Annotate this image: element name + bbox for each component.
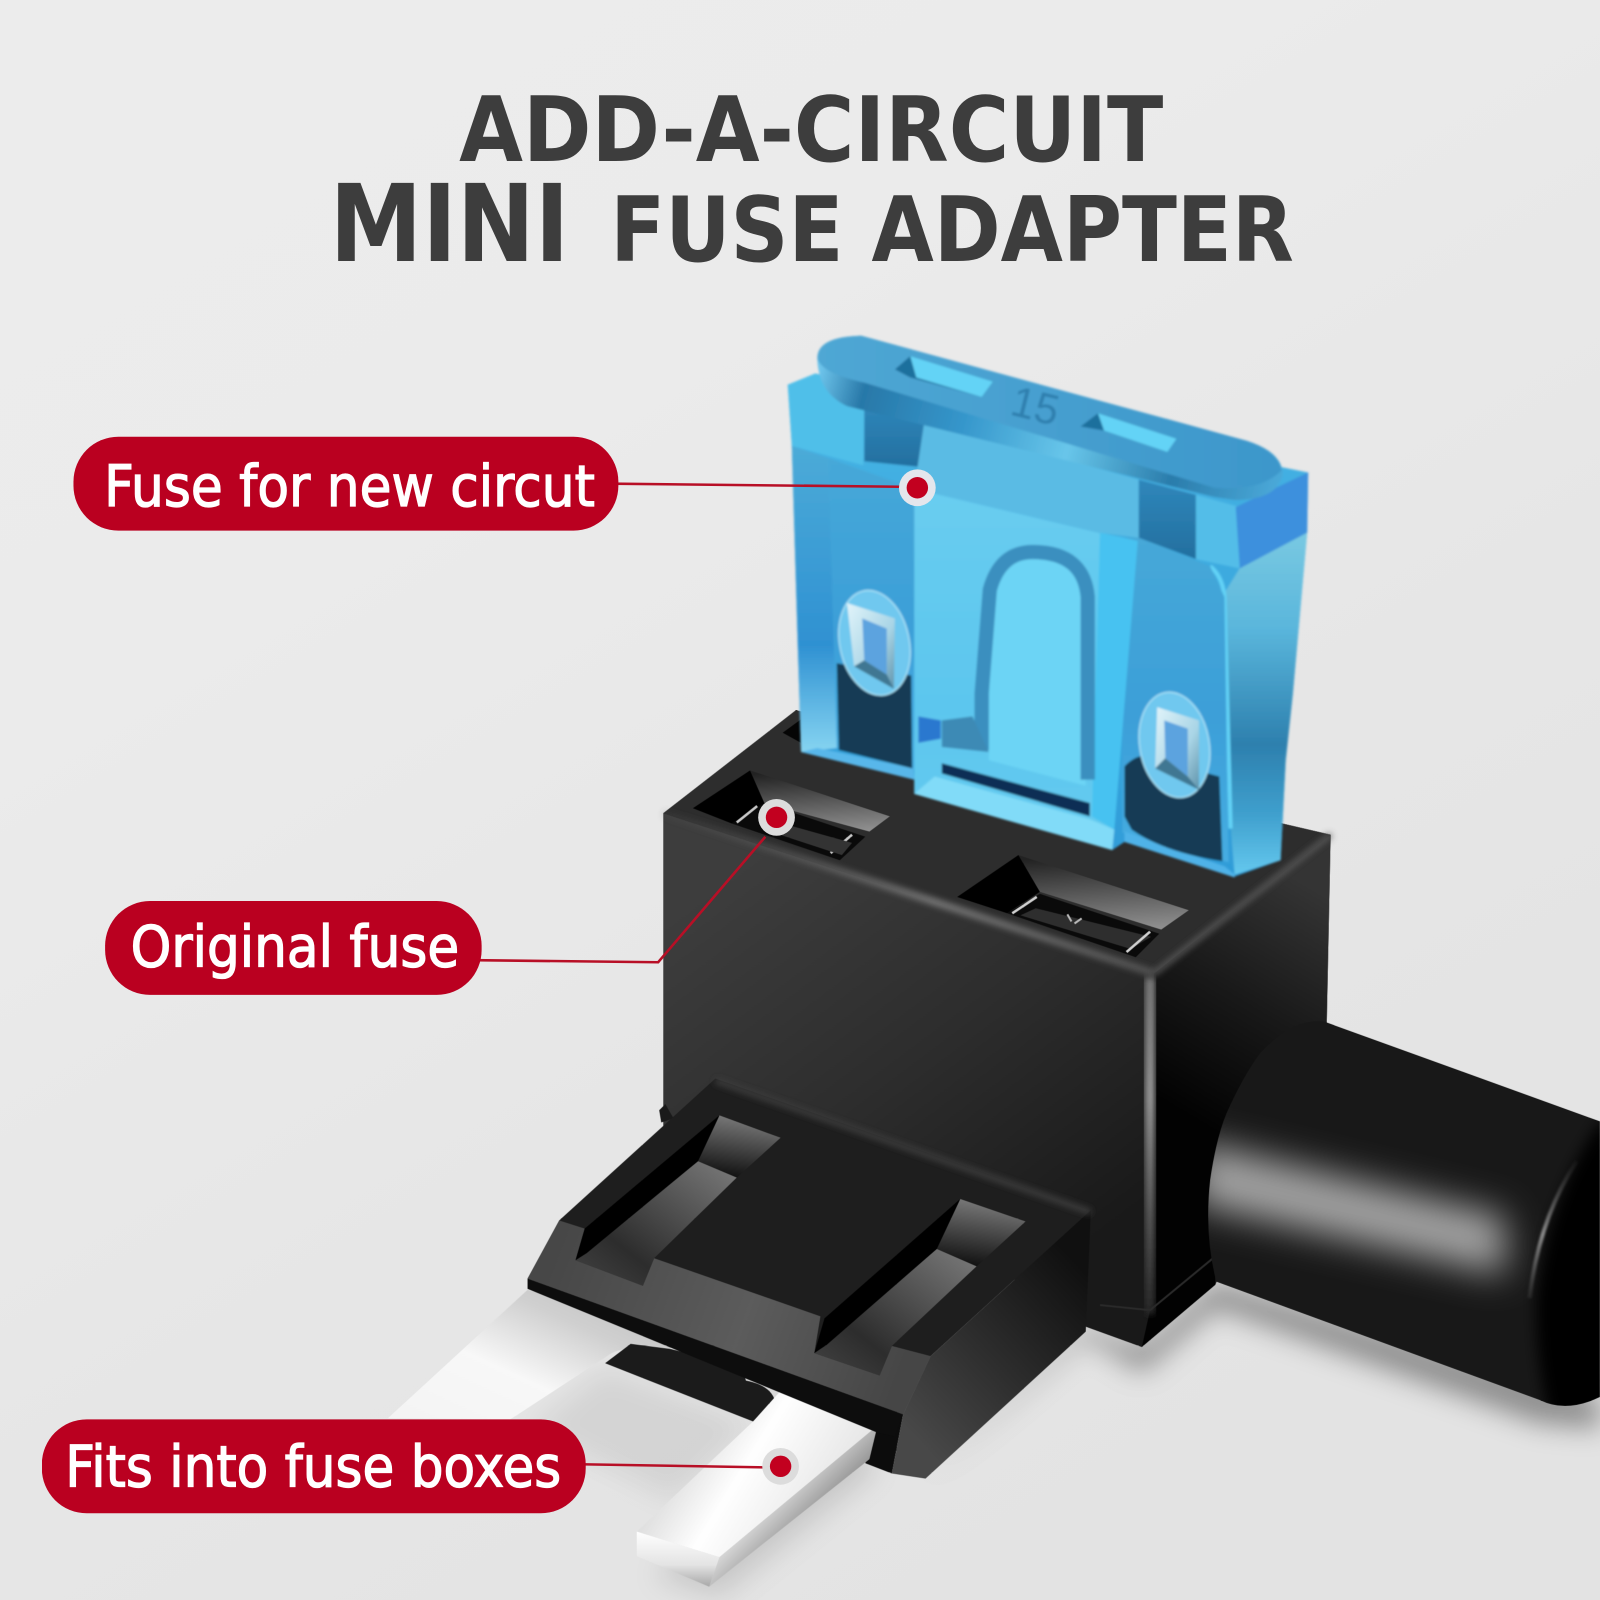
boot base — [1194, 1010, 1600, 1418]
housing right face — [1142, 835, 1331, 1347]
centre shoulder — [914, 420, 1139, 538]
cable boot — [1208, 1022, 1600, 1406]
left shoulder — [788, 373, 867, 465]
cap rating number: 15 — [1006, 377, 1064, 436]
ground shadows — [531, 1282, 1600, 1597]
trace foot — [942, 716, 989, 752]
housing bottom lip — [1100, 1257, 1214, 1310]
right shoulder side — [1236, 472, 1308, 568]
blade tip — [637, 1532, 719, 1587]
plug lower edge — [528, 1279, 903, 1437]
strip below slit — [914, 777, 1114, 850]
rear slot — [783, 719, 801, 743]
callout: fits into fuse boxes — [42, 1419, 799, 1513]
leader line — [580, 1464, 765, 1467]
label pill — [105, 901, 482, 995]
right shoulder shade — [1139, 480, 1196, 559]
plug — [388, 1079, 1091, 1587]
label text: Original fuse — [131, 914, 459, 980]
title word: mini: MINI — [330, 163, 569, 287]
housing corner highlight — [1145, 978, 1155, 1314]
bright strip — [1092, 533, 1138, 830]
left rivet — [830, 584, 919, 702]
cap right slot — [1081, 413, 1177, 452]
fuse right side — [1224, 533, 1307, 874]
right blade — [637, 1371, 878, 1587]
plug wall beside blade — [865, 1414, 903, 1473]
label text: Fits into fuse boxes — [65, 1435, 561, 1501]
blade side — [709, 1426, 878, 1587]
fuse body — [788, 373, 1308, 877]
fuse window slit — [942, 763, 1090, 816]
right rivet — [1131, 687, 1218, 803]
product: fuse adapter illustration — [388, 336, 1600, 1597]
callout: fuse for new circuit — [73, 437, 936, 531]
plug back ridge — [715, 1081, 1091, 1212]
label pill — [42, 1419, 586, 1513]
inner bright edge — [1210, 566, 1231, 829]
leader line — [476, 837, 765, 962]
title line: add-a-circuit: ADD-A-CIRCUIT — [459, 79, 1163, 183]
bottom lips — [801, 748, 1235, 878]
title — [330, 79, 1294, 287]
left plug slot — [576, 1115, 781, 1286]
label pill — [73, 437, 618, 531]
trace inner fill — [989, 558, 1086, 786]
callout: original fuse — [105, 799, 795, 995]
blade hook — [743, 1371, 782, 1403]
U-shaped fuse trace — [918, 552, 1088, 786]
boot end rim — [1530, 1161, 1577, 1298]
blade top — [637, 1391, 878, 1557]
left fuse slot — [693, 770, 890, 860]
trace line — [982, 552, 1088, 780]
housing silhouette — [663, 710, 1331, 1347]
marker dot — [758, 799, 795, 836]
marker dot — [762, 1448, 799, 1485]
right window — [1122, 538, 1229, 862]
right plug slot — [814, 1199, 1026, 1376]
label text: Fuse for new circut — [104, 454, 595, 520]
right black pin — [1124, 756, 1222, 861]
plug front bevel — [528, 1220, 931, 1414]
plug top — [528, 1079, 1091, 1414]
housing left face — [663, 813, 1154, 1347]
leader line — [612, 484, 900, 487]
small contact — [918, 716, 941, 743]
marker dot — [899, 469, 936, 506]
right shoulder — [1196, 495, 1240, 568]
left window — [829, 458, 914, 770]
boot highlight — [1194, 1141, 1505, 1276]
boot end cap — [1537, 1122, 1600, 1423]
gap between blades — [605, 1344, 788, 1421]
plug notch — [659, 1104, 673, 1122]
fuse cap — [817, 336, 1283, 500]
plug side — [892, 1210, 1091, 1479]
left strip — [792, 446, 837, 752]
title words: fuse adapter: FUSE ADAPTER — [610, 179, 1294, 283]
blue mini fuse — [788, 336, 1308, 878]
housing ridge highlights — [663, 813, 1331, 973]
right fuse slot — [957, 855, 1189, 957]
cap left slot — [895, 356, 993, 397]
left black pin — [837, 663, 912, 768]
centre element — [914, 489, 1123, 850]
housing top face — [663, 710, 1331, 973]
left shoulder shade — [864, 403, 924, 467]
black housing — [663, 710, 1331, 1347]
left blade — [388, 1290, 670, 1419]
